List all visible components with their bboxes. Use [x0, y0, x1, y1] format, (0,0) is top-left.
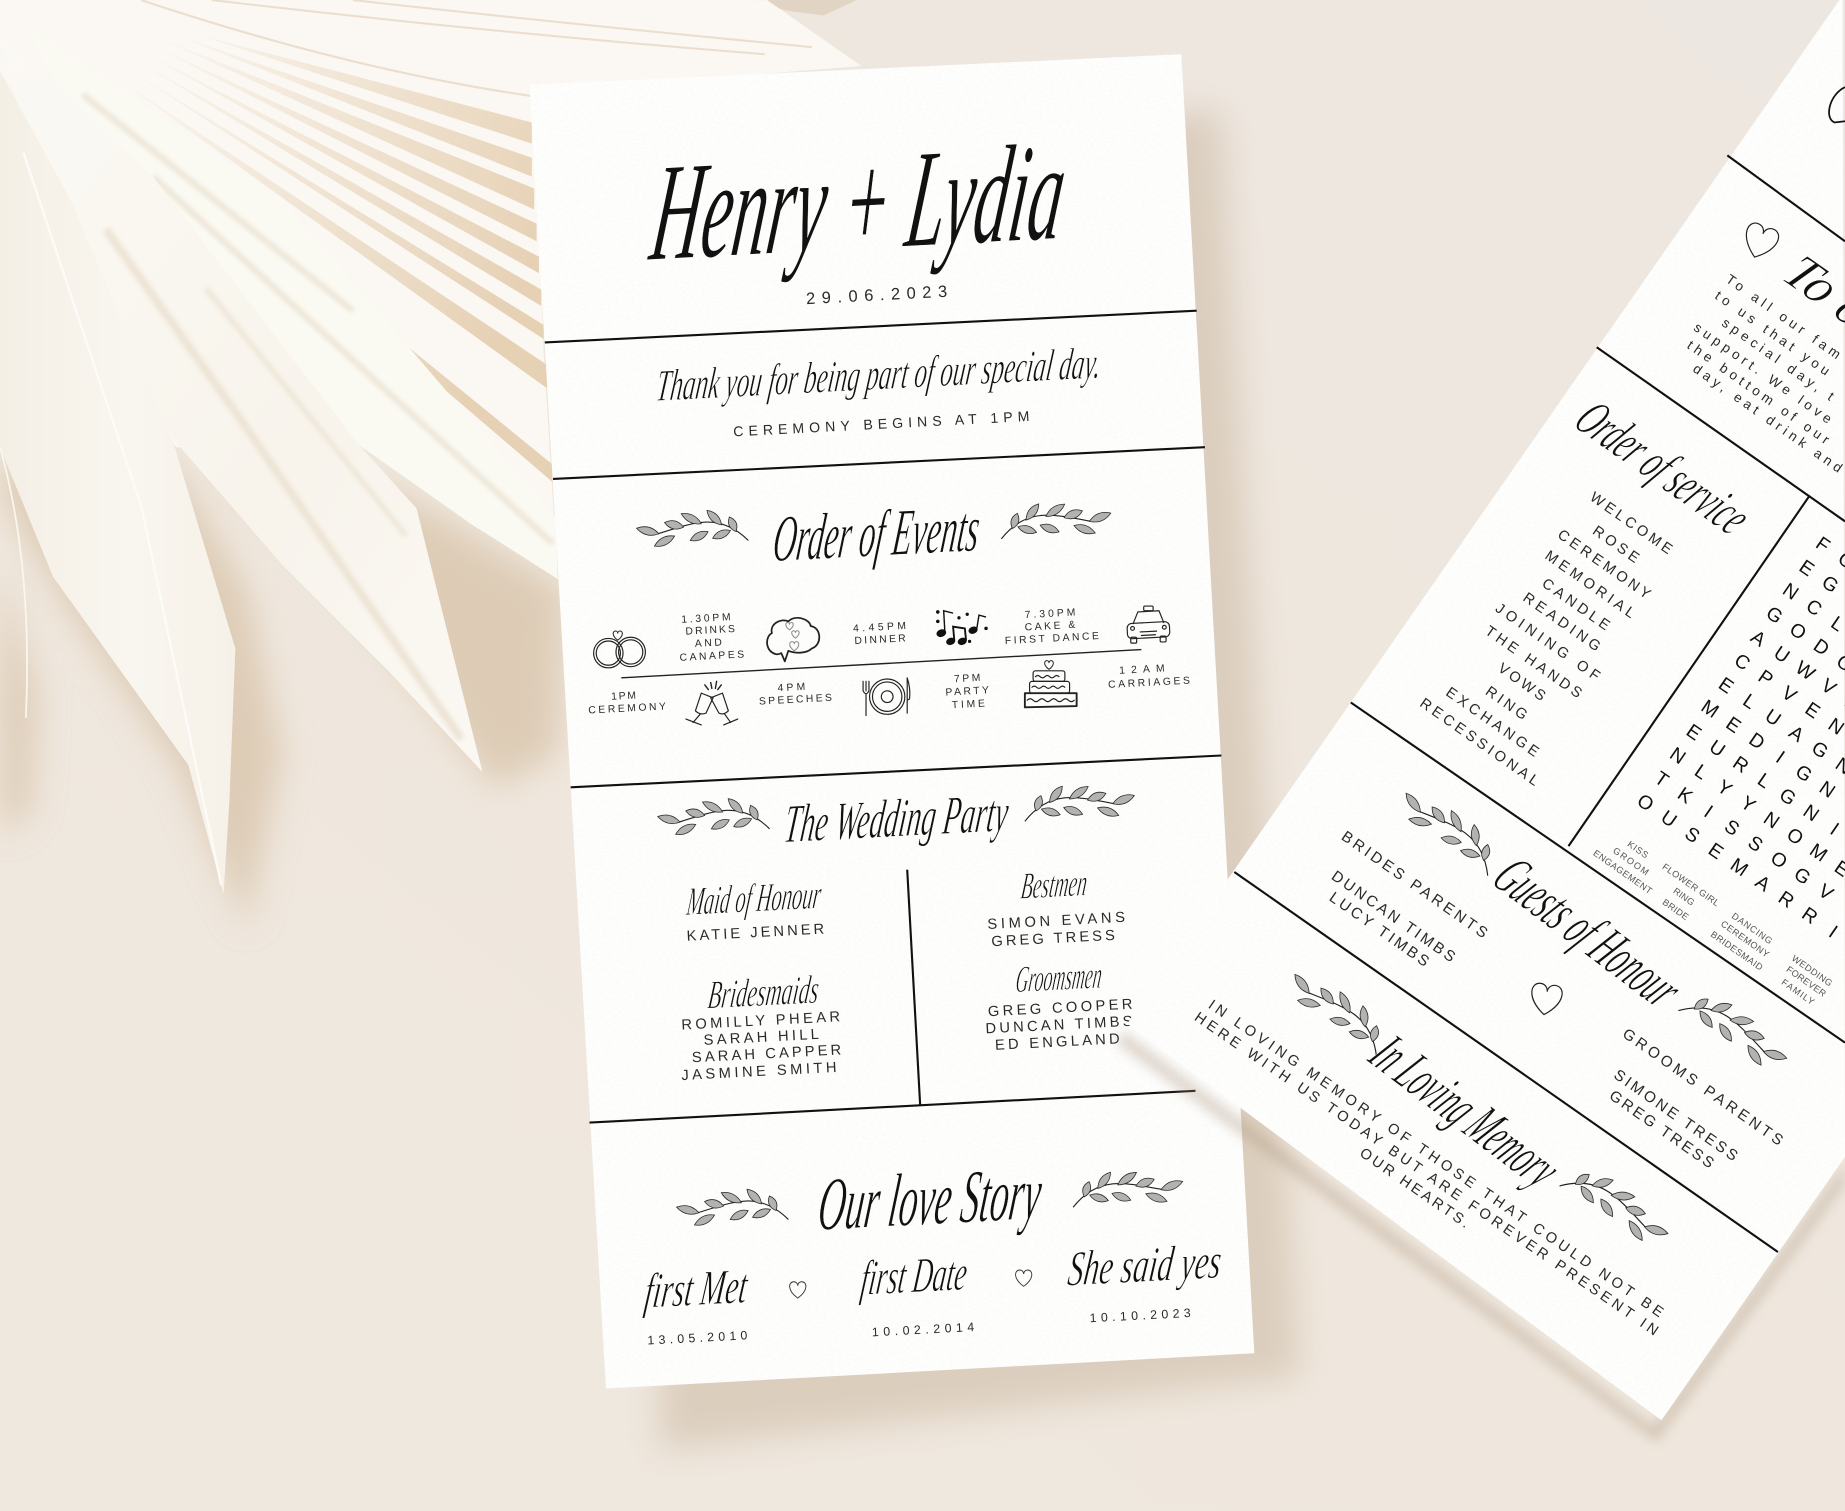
groomsmen: [985, 955, 1133, 1054]
milestone: she said yes: 10.10.2023: [1089, 1306, 1191, 1325]
timeline labels: TIME: [952, 699, 985, 711]
sprig right: [1021, 778, 1137, 827]
milestone: she said yes: She said yes: [1065, 1233, 1225, 1296]
service list: VOWS: [1495, 660, 1548, 705]
cropped title flourish: [1829, 87, 1845, 122]
panel: thank you: [654, 338, 1104, 439]
heading: The Wedding Party: [781, 781, 1012, 854]
service list: RECESSIONAL: [1417, 696, 1541, 790]
word search word list: [1591, 839, 1834, 1007]
service list: WELCOME: [1587, 489, 1675, 558]
timeline labels: 1PM: [611, 691, 636, 703]
timeline labels: CARRIAGES: [1108, 676, 1190, 691]
service list: THE HANDS: [1482, 623, 1585, 702]
timeline labels: 4PM: [777, 682, 806, 694]
thin strand: [0, 447, 27, 718]
service list: JOINING OF: [1492, 601, 1603, 685]
timeline labels: PARTY: [945, 685, 989, 699]
timeline labels: 12AM: [1119, 663, 1165, 677]
top blade fold lines: [141, 0, 812, 97]
word search grid: CPVEN: [1730, 649, 1845, 740]
sprig left: [658, 799, 770, 835]
message: [1684, 271, 1845, 478]
milestone: first date: 10.02.2014: [872, 1320, 975, 1339]
groomsmen: DUNCAN TIMBS: [985, 1014, 1133, 1037]
milestone: first met: 13.05.2010: [647, 1328, 748, 1348]
word search word list: KISS: [1626, 839, 1650, 860]
icon: heart: [1016, 1270, 1032, 1286]
bestmen: SIMON EVANS: [987, 910, 1126, 933]
bridesmaids: ROMILLY PHEAR: [681, 1009, 840, 1034]
word search word list: BRIDESMAID: [1709, 929, 1765, 973]
sprig left: [677, 1189, 788, 1225]
grooms parents: SIMONE TRESS: [1610, 1066, 1741, 1165]
heading: Order of Events: [769, 492, 984, 576]
timeline labels: AND: [695, 638, 722, 650]
paper: [529, 54, 1254, 1389]
message: support. We love: [1691, 320, 1838, 429]
second programme card: [1127, 0, 1845, 1420]
memorial message: IN LOVING MEMORY OF THOSE THAT COULD NOT BE: [1205, 997, 1666, 1321]
service list: ROSE: [1589, 523, 1642, 567]
couple names: Henry + Lydia: [643, 114, 1074, 291]
message: day, eat drink and: [1690, 361, 1845, 478]
sprig right: [1675, 983, 1796, 1075]
icon: heart: [790, 1282, 806, 1298]
milestone: she said yes: [1065, 1233, 1225, 1325]
bestmen: GREG TRESS: [991, 928, 1115, 950]
panel: order of service: [1417, 390, 1765, 790]
icon: plate and cutlery: [863, 678, 910, 715]
service list: READING: [1520, 590, 1603, 655]
timeline labels: CANAPES: [679, 649, 745, 664]
milestone: first met: first Met: [642, 1258, 751, 1319]
section dividers: [545, 311, 1221, 1123]
bridesmaids: JASMINE SMITH: [681, 1060, 837, 1084]
sprig right: [1556, 1158, 1677, 1250]
icon: music notes: [936, 611, 987, 645]
blade creases: [106, 35, 553, 483]
word search word list: DANCING: [1730, 911, 1774, 946]
milestone: first met: [642, 1258, 751, 1348]
top curled edge: [753, 0, 857, 15]
service list: [1417, 489, 1675, 790]
word search word list: FAMILY: [1780, 977, 1816, 1007]
bestmen: [987, 862, 1126, 950]
icon: wedding rings: [594, 631, 645, 668]
bridesmaids: Bridesmaids: [706, 967, 822, 1017]
word search grid: OUSEMARRI: [1633, 790, 1841, 943]
timeline labels: CAKE &: [1024, 620, 1076, 633]
maid of honour: KATIE JENNER: [686, 922, 825, 945]
service list: CANDLE: [1539, 576, 1613, 634]
ceremony time: CEREMONY BEGINS AT 1PM: [733, 408, 1030, 439]
service list: MEMORIAL: [1542, 548, 1638, 622]
brides parents: BRIDES PARENTS: [1338, 828, 1491, 942]
milestone: first date: [858, 1245, 975, 1339]
service list: RING: [1482, 684, 1530, 724]
message: special day, t: [1719, 315, 1840, 406]
panel: the wedding party: [658, 778, 1137, 1084]
memorial message: OUR HEARTS.: [1356, 1145, 1472, 1232]
sprig right: [998, 495, 1113, 545]
icon: speech cloud with hearts: [767, 618, 819, 661]
upper blades: [0, 0, 861, 579]
word search grid: [1632, 531, 1845, 943]
timeline labels: [588, 607, 1190, 717]
bridesmaids: [681, 967, 842, 1084]
word search word list: WEDDING: [1790, 953, 1834, 988]
leaf shadows: [0, 424, 565, 930]
wedding date: 29.06.2023: [806, 283, 948, 308]
middle blade shading: [82, 94, 553, 544]
timeline line: [621, 650, 1141, 678]
icon: champagne flutes: [686, 681, 738, 725]
card shadow: main programme: [659, 112, 1300, 1450]
panel: to our family: [1684, 221, 1845, 478]
sprig left: [1394, 779, 1507, 880]
paper texture: [1127, 0, 1845, 1420]
palm leaf: [0, 0, 861, 930]
icon: tiered cake: [1025, 661, 1077, 707]
timeline labels: 4.45PM: [853, 621, 906, 635]
section dividers: [1234, 155, 1845, 1252]
word search word list: BRIDE: [1661, 897, 1690, 922]
timeline labels: 7PM: [954, 673, 981, 685]
panel: guests of honour: [1326, 779, 1796, 1172]
word search grid: MEDIGN: [1697, 696, 1839, 803]
leaf two: [0, 35, 482, 772]
word search word list: FOREVER: [1785, 964, 1828, 999]
timeline labels: FIRST DANCE: [1005, 631, 1099, 647]
leaf two shading: [106, 230, 461, 739]
header: names and date: [643, 114, 1074, 308]
bridesmaids: SARAH HILL: [703, 1027, 819, 1049]
sprig right: [1069, 1164, 1185, 1213]
word search word list: GROOM: [1611, 845, 1651, 877]
timeline labels: 1.30PM: [681, 612, 731, 626]
maid of honour: Maid of Honour: [684, 872, 824, 924]
brides parents: DUNCAN TIMBS: [1328, 868, 1458, 966]
icon: taxi car: [1127, 606, 1170, 643]
icon: heart: [1529, 982, 1563, 1017]
message: To all our fam: [1723, 271, 1845, 364]
word search grid: EURLGNI: [1682, 720, 1843, 840]
groomsmen: GREG COOPER: [987, 997, 1133, 1020]
leaf one: [0, 71, 235, 894]
panel: order of events: [588, 492, 1190, 725]
timeline labels: 7.30PM: [1024, 607, 1076, 621]
paper: [1127, 0, 1845, 1420]
leaf one crease: [24, 153, 221, 885]
groomsmen: Groomsmen: [1014, 955, 1104, 1001]
sprig left: [637, 510, 748, 546]
grooms parents: GROOMS PARENTS: [1619, 1025, 1786, 1149]
word search word list: CEREMONY: [1719, 919, 1771, 959]
main programme card: [529, 54, 1254, 1389]
service list: EXCHANGE: [1443, 685, 1542, 761]
message: to us that you: [1712, 288, 1836, 381]
word search word list: RING: [1671, 886, 1696, 908]
brides parents: LUCY TIMBS: [1326, 889, 1432, 970]
sprig left: [1283, 960, 1396, 1062]
grooms parents: GREG TRESS: [1606, 1087, 1717, 1172]
thank you script: Thank you for being part of our special day.: [654, 338, 1104, 411]
paper texture: [529, 54, 1254, 1389]
heading: In Loving Memory: [1356, 1023, 1576, 1198]
word search grid: TKISSOGV: [1650, 767, 1837, 905]
panel: in loving memory: [1191, 960, 1677, 1339]
message: the bottom of our: [1684, 337, 1836, 450]
middle blade: [24, 24, 558, 579]
memorial message: HERE WITH US TODAY BUT ARE FOREVER PRESENT IN: [1191, 1010, 1661, 1339]
card shadow: second programme: [1115, 1031, 1845, 1443]
heading: Our love Story: [814, 1151, 1047, 1247]
word search word list: ENGAGEMENT: [1591, 848, 1654, 896]
groomsmen: ED ENGLAND: [995, 1031, 1120, 1054]
timeline labels: DINNER: [854, 633, 906, 647]
word search word list: FLOWER GIRL: [1661, 862, 1721, 908]
timeline labels: SPEECHES: [759, 693, 832, 708]
milestone: first date: first Date: [858, 1245, 971, 1306]
icon: heart: [1739, 221, 1781, 263]
maid of honour: [684, 872, 825, 945]
panel: our love story: [642, 1151, 1225, 1348]
bestmen: Bestmen: [1019, 862, 1090, 908]
service list: CEREMONY: [1554, 527, 1653, 603]
timeline labels: CEREMONY: [588, 701, 666, 717]
timeline labels: DRINKS: [685, 624, 735, 638]
bridesmaids: SARAH CAPPER: [692, 1042, 842, 1066]
